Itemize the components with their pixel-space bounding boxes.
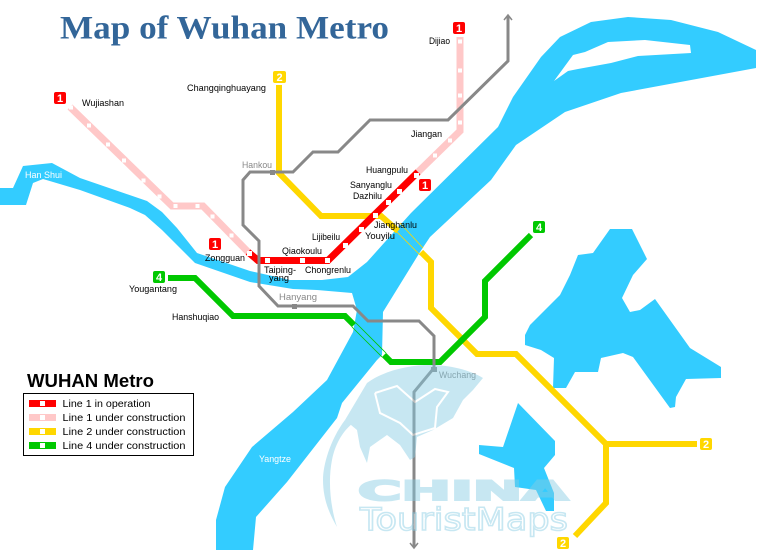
line number badges: 4 [156, 272, 163, 284]
line number badges: 2 [276, 72, 283, 84]
station labels: Sanyanglu [350, 180, 392, 191]
line number badges: 1 [57, 93, 63, 105]
station labels: Qiaokoulu [282, 246, 322, 257]
line 2 yellow [279, 85, 697, 536]
lake: east [525, 229, 721, 408]
station labels: Hanyang [279, 292, 317, 303]
station labels: Chongrenlu [305, 265, 351, 276]
station labels: Dijiao [429, 36, 450, 47]
station labels: yang [269, 273, 289, 284]
label: Yangtze: Yangtze [259, 454, 291, 465]
station labels: Zongguan [205, 253, 245, 264]
line number badges: 1 [456, 23, 462, 35]
legend title: WUHAN Metro [27, 371, 154, 391]
station labels [82, 36, 476, 381]
line 1 under construction pink [69, 37, 462, 254]
legend [24, 394, 194, 456]
line number badges: 2 [703, 439, 709, 451]
station labels: Wujiashan [82, 98, 124, 109]
line 4 green [168, 235, 531, 362]
line number badges: 4 [536, 222, 543, 234]
label: Han Shui: Han Shui [25, 170, 62, 181]
station labels: Jiangan [411, 129, 442, 140]
watermark: China Tourist Maps globe: TouristMaps [359, 502, 568, 538]
station labels: Huangpulu [366, 165, 408, 176]
station labels: Changqinghuayang [187, 83, 266, 94]
legend item: line 1 under construction: Line 1 under construction [62, 412, 186, 424]
legend item: line 1 in operation: Line 1 in operation [62, 398, 151, 410]
legend item: line 4 under construction: Line 4 under construction [62, 440, 186, 452]
legend item: line 2 under construction: Line 2 under construction [62, 426, 186, 438]
station labels: Wuchang [439, 370, 476, 381]
watermark: China Tourist Maps globe [323, 365, 568, 538]
station labels: Youyilu [365, 231, 395, 242]
station labels: Dazhilu [353, 191, 382, 202]
station labels: Hanshuqiao [172, 312, 219, 323]
line number badges: 2 [560, 538, 566, 550]
watermark: China Tourist Maps globe: CHINA [358, 476, 568, 507]
station labels: Taiping- [264, 265, 296, 276]
lake: south [479, 403, 555, 511]
station labels: Hankou [242, 160, 272, 171]
gray rail line [243, 15, 512, 548]
station labels: Lijibeilu [312, 232, 340, 243]
line number badges: 1 [422, 180, 428, 192]
title: Map of Wuhan Metro [60, 10, 389, 46]
station labels: Jianghanlu [374, 220, 417, 231]
station labels: Yougantang [129, 284, 177, 295]
line number badges: 1 [212, 239, 218, 251]
line 1 in operation red [247, 172, 419, 263]
